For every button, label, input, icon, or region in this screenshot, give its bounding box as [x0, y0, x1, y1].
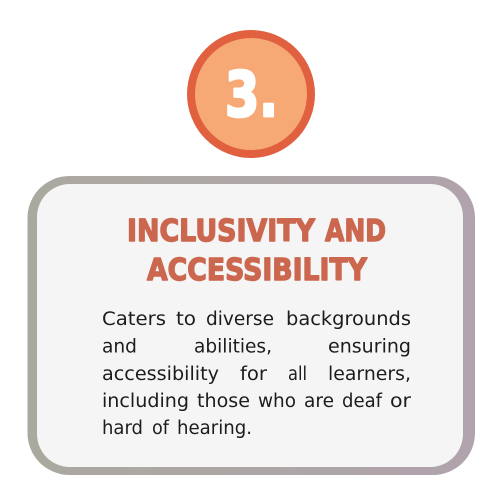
body text: diverse	[206, 309, 274, 330]
body text: ensuring	[328, 336, 411, 358]
body text: learners,	[328, 364, 411, 385]
body text: and	[102, 336, 137, 358]
body text: those	[197, 391, 250, 412]
heading	[127, 214, 386, 288]
body text: to	[176, 309, 196, 330]
body text: including	[102, 391, 189, 412]
body text: who	[258, 391, 296, 412]
body text: deaf	[342, 391, 382, 412]
body text: hearing.	[177, 418, 252, 439]
body text: abilities,	[194, 336, 272, 358]
heading: ACCESSIBILITY	[147, 253, 368, 288]
body text: of	[152, 418, 169, 439]
body text: or	[390, 391, 411, 412]
number badge	[191, 34, 311, 154]
body text: are	[304, 391, 334, 412]
body text: Caters	[102, 309, 166, 330]
body text: accessibility	[102, 364, 219, 385]
body text	[102, 309, 411, 439]
body text: all	[288, 364, 307, 385]
body text: hard	[102, 418, 143, 439]
body text: for	[240, 364, 267, 385]
body text: backgrounds	[286, 309, 411, 330]
panel: description card	[28, 176, 475, 475]
heading: INCLUSIVITY	[127, 214, 316, 249]
number: 3.: 3.	[225, 58, 278, 131]
heading: AND	[325, 214, 386, 249]
